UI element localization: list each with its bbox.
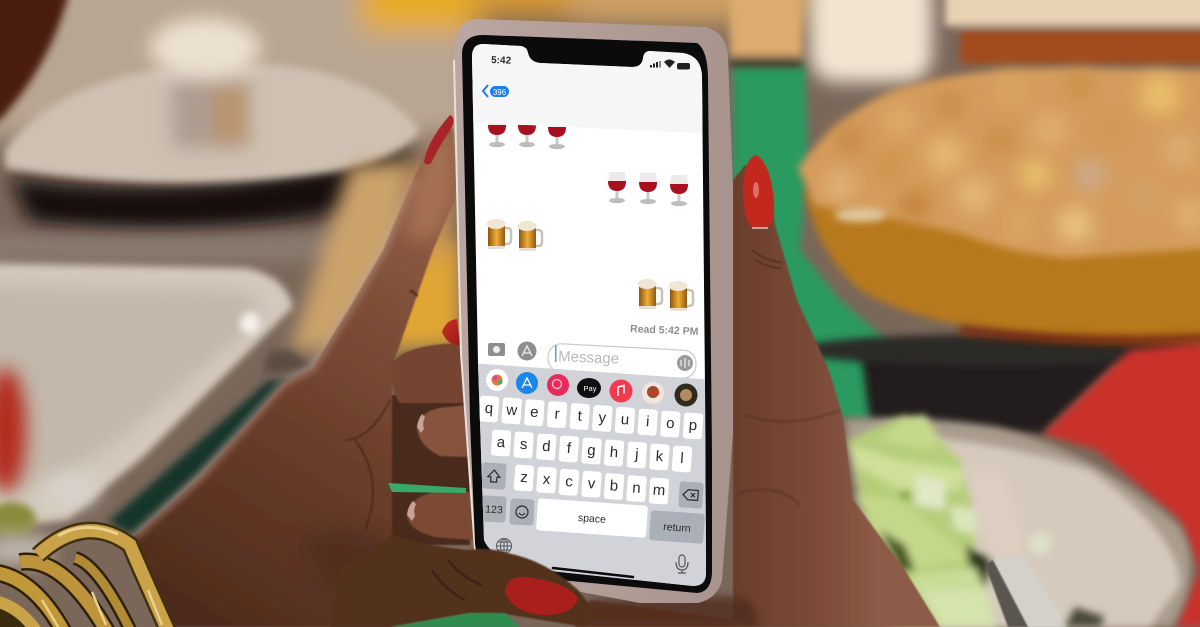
- keyboard keys row 1: t: [577, 407, 583, 425]
- tablecloth: green: [733, 66, 915, 418]
- camera icon: [488, 343, 505, 356]
- globe key: [496, 538, 512, 554]
- left thumb over phone: [330, 535, 590, 627]
- back button with count: 396: [493, 88, 507, 97]
- emoji: wine glasses right: [608, 172, 688, 206]
- middle curled finger: [417, 405, 470, 457]
- emoji: beer mugs left: [486, 219, 542, 251]
- dark table right: [860, 345, 1200, 434]
- top left table and plate: [0, 0, 810, 140]
- keyboard keys row 3: [481, 462, 704, 509]
- app drawer: [486, 369, 698, 406]
- lower table left: [0, 235, 400, 261]
- red cloth: [1043, 342, 1200, 627]
- keyboard keys row 2: f: [566, 440, 572, 457]
- green cloth seen between fingers: [388, 483, 466, 493]
- keyboard keys row 2: g: [587, 442, 596, 459]
- lower curled finger: [407, 492, 474, 540]
- dark hand corner: [0, 0, 72, 130]
- smartphone: [453, 19, 733, 603]
- salad: [848, 415, 997, 627]
- plate top left: [5, 64, 420, 183]
- keyboard keys row 2: j: [634, 446, 639, 463]
- keyboard keys row 1: q: [484, 400, 494, 417]
- keyboard keys row 4: [481, 495, 705, 544]
- status icons: [650, 60, 690, 70]
- nail: left index finger: [424, 115, 454, 164]
- keyboard keys row 2: h: [609, 444, 619, 461]
- keyboard keys row 4: space: [578, 512, 606, 526]
- keyboard keys row 1: i: [645, 413, 650, 430]
- bread behind hand: [290, 160, 460, 350]
- nail: right index finger: [743, 155, 774, 228]
- nail: finger tips: [407, 414, 425, 521]
- gold bracelets: [0, 527, 172, 627]
- app store icon: [518, 342, 536, 360]
- keyboard keys row 2: k: [655, 448, 664, 465]
- knife handle: [993, 555, 1068, 627]
- cup: [150, 18, 260, 148]
- message input: Message: [558, 348, 619, 368]
- candle: [810, 0, 932, 82]
- keyboard keys row 1: y: [598, 409, 607, 427]
- crumb texture: [824, 70, 1200, 243]
- keyboard keys row 2: [491, 429, 692, 473]
- microphone key: [676, 555, 688, 573]
- left hand fingers and palm: [133, 128, 480, 627]
- home indicator: [553, 568, 633, 577]
- keyboard keys row 1: e: [530, 404, 539, 421]
- keyboard keys row 1: [479, 395, 703, 440]
- shadow gap behind fingers: [385, 395, 470, 545]
- edge highlight: [133, 180, 413, 537]
- read receipt: Read 5:42 PM: [630, 323, 699, 338]
- index tip light: [405, 128, 455, 240]
- plate right with salad: [845, 415, 1191, 627]
- palm shading: [300, 530, 400, 590]
- keyboard keys row 3: m: [652, 482, 666, 499]
- green cloth under thumb: [390, 613, 520, 627]
- keyboard tray: [478, 364, 706, 586]
- keyboard keys row 3: z: [520, 469, 528, 486]
- keyboard keys row 1: o: [666, 415, 675, 432]
- white dish left: [0, 263, 312, 565]
- keyboard keys row 2: l: [680, 450, 684, 467]
- knife blade: [970, 467, 1025, 560]
- dark shadow under plate: [10, 148, 410, 230]
- keyboard keys row 1: u: [620, 411, 630, 429]
- keyboard keys row 3: c: [565, 473, 574, 491]
- status bar time: 5:42: [491, 55, 512, 67]
- keyboard keys row 2: d: [542, 438, 551, 455]
- right hand: [575, 165, 940, 627]
- keyboard keys row 1: r: [554, 406, 560, 423]
- keyboard keys row 2: s: [519, 436, 528, 453]
- upper curled finger: [392, 343, 466, 403]
- keyboard keys row 4: 123: [485, 504, 503, 516]
- phone case: [453, 19, 733, 603]
- app drawer: Pay: [584, 384, 597, 393]
- keyboard keys row 3: b: [609, 477, 619, 495]
- message input: [547, 343, 697, 379]
- keyboard keys row 3: n: [632, 479, 641, 497]
- navigation bar: [472, 44, 703, 134]
- keyboard keys row 3: v: [587, 475, 596, 493]
- casserole dish: [795, 68, 1200, 366]
- screen: [472, 44, 706, 586]
- keyboard keys row 4: return: [663, 521, 691, 535]
- keyboard keys row 1: w: [505, 401, 518, 419]
- back button with count: [483, 85, 509, 97]
- emoji: beer mugs right: [638, 279, 693, 311]
- emoji: wine glasses top row: [488, 123, 566, 150]
- keyboard keys row 1: p: [688, 417, 698, 434]
- phone bezel: [462, 35, 712, 593]
- nail: left thumb: [505, 577, 578, 615]
- top right items: [730, 0, 1200, 66]
- keyboard keys row 3: x: [542, 471, 551, 488]
- keyboard keys row 2: a: [496, 434, 506, 451]
- nail: left small finger: [442, 319, 460, 345]
